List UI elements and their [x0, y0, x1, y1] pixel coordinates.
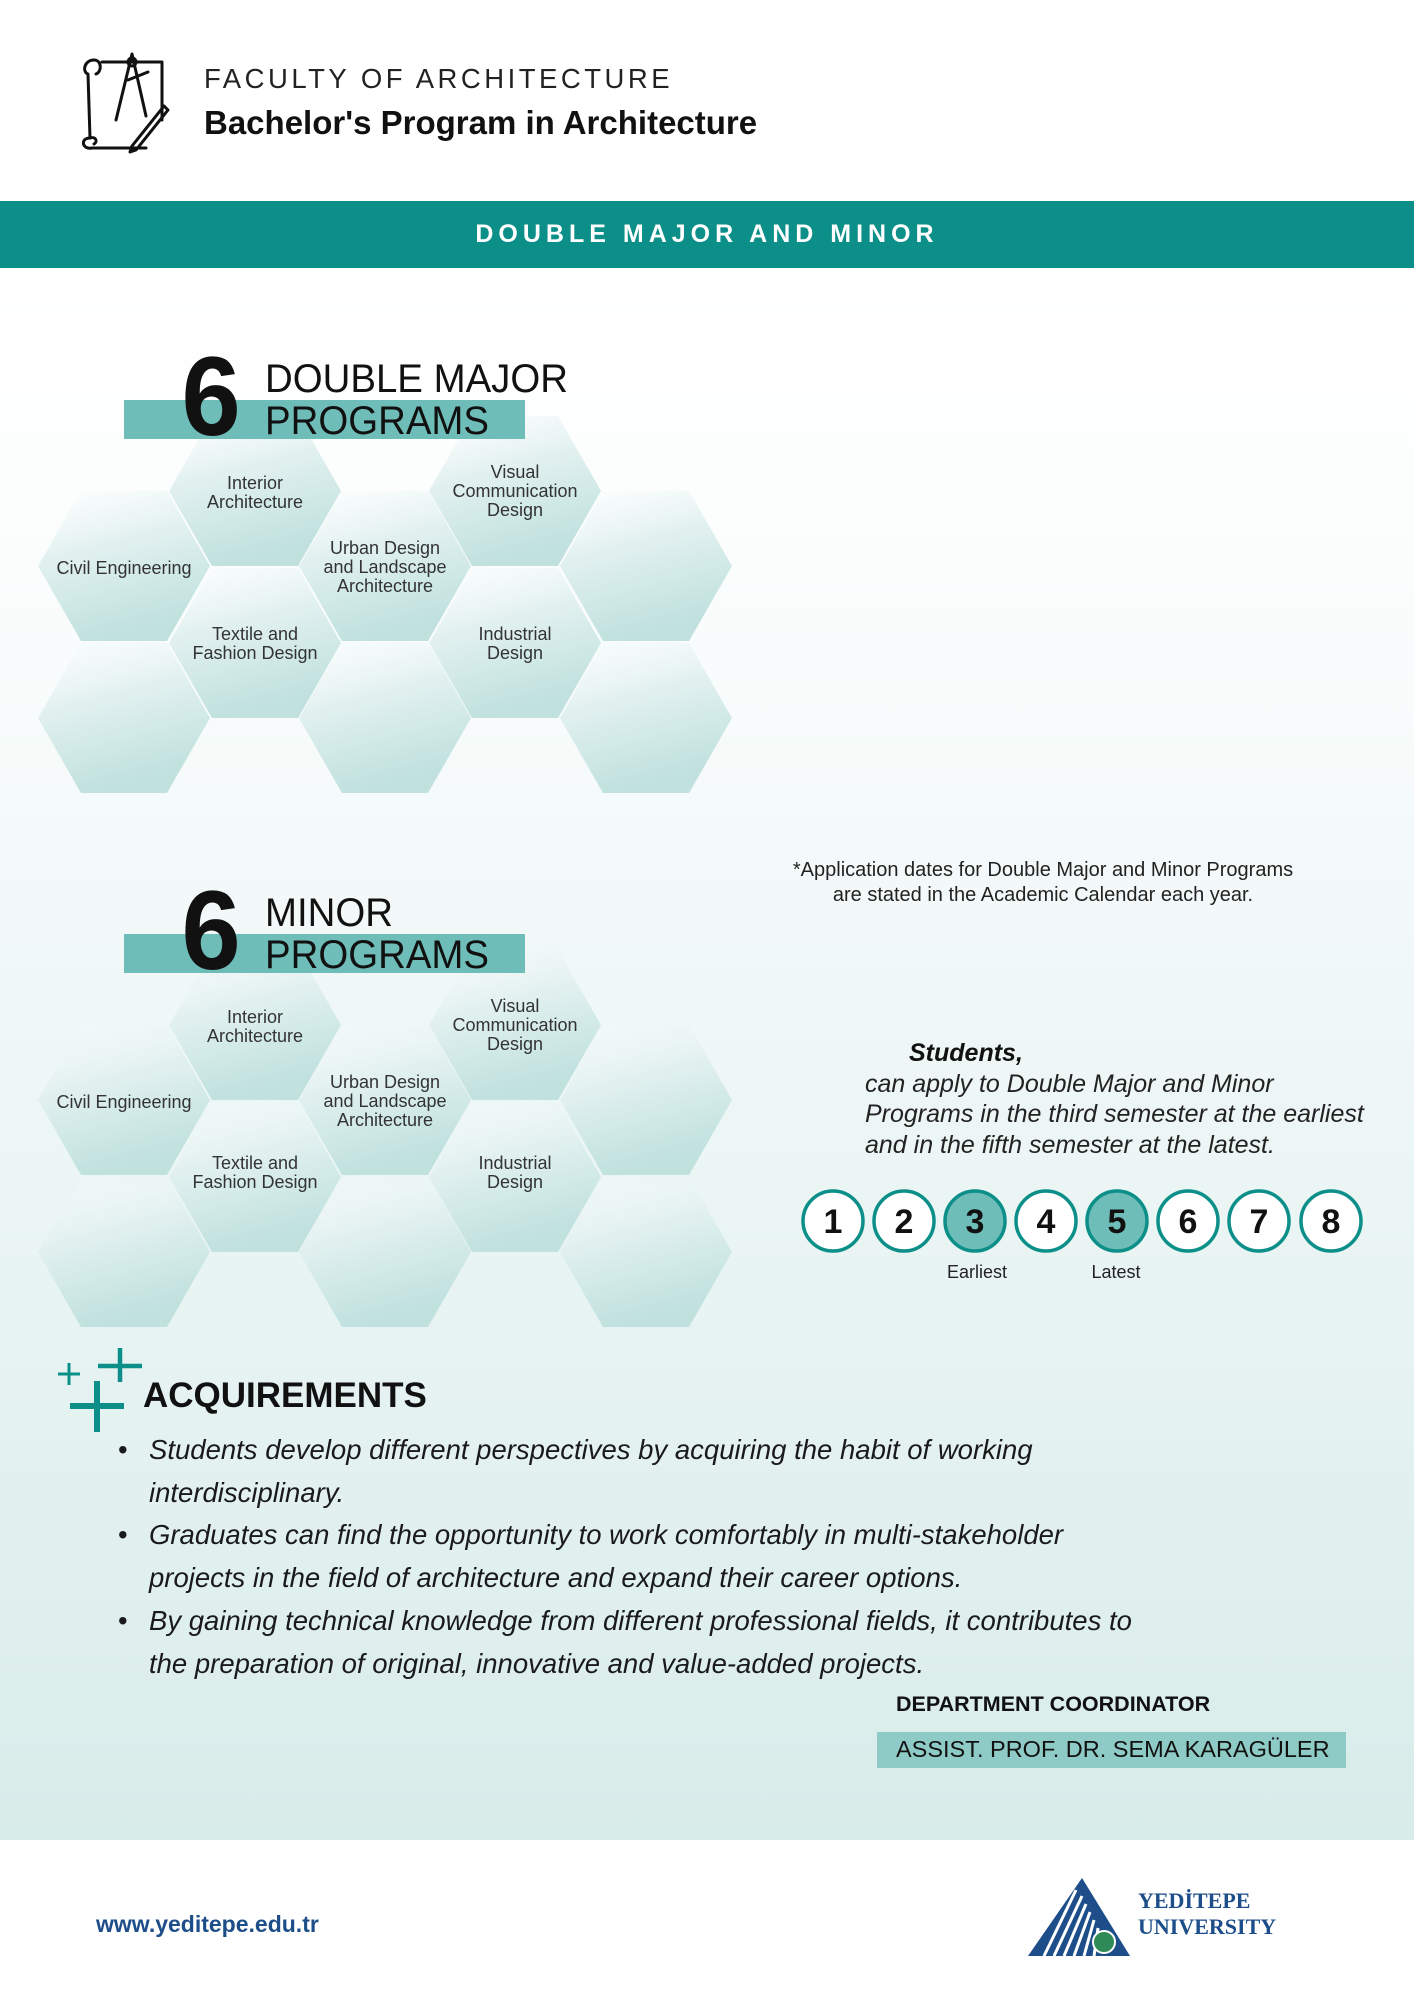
- hexagon grid: double major programs: Civil Engineering: [56, 558, 192, 578]
- list: acquirements: •: [118, 1519, 128, 1550]
- semester circles: 3: [966, 1203, 984, 1241]
- hexagon grid: minor programs: Interior: [227, 1007, 283, 1027]
- hexagon grid: minor programs: Communication: [452, 1015, 578, 1035]
- banner: DOUBLE MAJOR AND MINOR: [475, 220, 939, 248]
- heading: 6 minor programs: MINOR: [265, 891, 393, 935]
- hexagon grid: minor programs: Fashion Design: [192, 1172, 318, 1192]
- hexagon grid: double major programs: Design: [487, 643, 543, 663]
- hexagon grid: double major programs: Industrial: [478, 624, 552, 644]
- hexagon grid: minor programs: Urban Design: [330, 1072, 440, 1092]
- semester circles: 7: [1250, 1203, 1268, 1241]
- hexagon grid: minor programs: Architecture: [207, 1026, 303, 1046]
- list: acquirements: interdisciplinary.: [149, 1477, 344, 1508]
- logo: yeditepe university: UNIVERSITY: [1138, 1914, 1276, 1939]
- text block: students: and in the fifth semester at the latest.: [865, 1130, 1275, 1158]
- semester circles: [801, 1189, 1363, 1282]
- heading: 6 double major programs: DOUBLE MAJOR: [265, 357, 568, 401]
- hexagon grid: minor programs: and Landscape: [323, 1091, 447, 1111]
- hexagon grid: minor programs: Industrial: [478, 1153, 552, 1173]
- list: acquirements: the preparation of original, innovative and value-added projects.: [149, 1648, 924, 1679]
- semester circles: 1: [824, 1203, 842, 1241]
- hexagon grid: double major programs: Textile and: [212, 624, 298, 644]
- hexagon grid: minor programs: Civil Engineering: [56, 1092, 192, 1112]
- icon: plus signs: [58, 1348, 142, 1432]
- list: acquirements: Graduates can find the opportunity to work comfortably in multi-stakeholder: [149, 1519, 1063, 1550]
- banner: [0, 201, 1414, 268]
- coordinator: DEPARTMENT COORDINATOR: [896, 1692, 1210, 1716]
- heading: 6 minor programs: 6: [182, 868, 241, 993]
- heading: 6 minor programs: PROGRAMS: [265, 933, 489, 977]
- logo: yeditepe university: [1028, 1878, 1276, 1956]
- semester circles: 6: [1179, 1203, 1197, 1241]
- coordinator: ASSIST. PROF. DR. SEMA KARAGÜLER: [896, 1736, 1330, 1762]
- text: Bachelor's Program in Architecture: [204, 104, 757, 141]
- note: application dates: *Application dates for Double Major and Minor Programs: [793, 859, 1293, 881]
- header text: FACULTY OF ARCHITECTURE: [204, 63, 673, 94]
- hexagon grid: double major programs: Communication: [452, 481, 578, 501]
- hexagon grid: double major programs: Design: [487, 500, 543, 520]
- list: acquirements: [118, 1434, 1132, 1679]
- hexagon grid: minor programs: Textile and: [212, 1153, 298, 1173]
- hexagon grid: double major programs: Architecture: [207, 492, 303, 512]
- hexagon grid: minor programs: Design: [487, 1172, 543, 1192]
- list: acquirements: •: [118, 1434, 128, 1465]
- heading: 6 double major programs: [124, 334, 568, 459]
- hexagon grid: double major programs: Fashion Design: [192, 643, 318, 663]
- semester circles: 5: [1108, 1203, 1126, 1241]
- text block: students: [865, 1039, 1365, 1158]
- semester circles: 2: [895, 1203, 913, 1241]
- logo: yeditepe university: YEDİTEPE: [1138, 1888, 1250, 1913]
- hexagon grid: double major programs: and Landscape: [323, 557, 447, 577]
- hexagon grid: double major programs: Urban Design: [330, 538, 440, 558]
- note: application dates: are stated in the Academic Calendar each year.: [833, 884, 1253, 906]
- text block: students: can apply to Double Major and Minor: [865, 1070, 1274, 1098]
- heading: 6 double major programs: 6: [182, 334, 241, 459]
- text block: students: Programs in the third semester at the earliest: [865, 1100, 1364, 1128]
- hexagon grid: minor programs: [38, 968, 732, 1327]
- icon: architecture scroll: [82, 52, 170, 154]
- semester circles: 8: [1322, 1203, 1340, 1241]
- list: acquirements: Students develop different perspectives by acquiring the habit of working: [149, 1434, 1033, 1465]
- hexagon grid: double major programs: [38, 416, 732, 793]
- semester circles: Latest: [1091, 1262, 1141, 1282]
- hexagon grid: minor programs: Visual: [491, 996, 539, 1016]
- footer url: www.yeditepe.edu.tr: [96, 1911, 319, 1937]
- semester circles: 4: [1037, 1203, 1056, 1241]
- hexagon grid: minor programs: Architecture: [337, 1110, 433, 1130]
- semester circles: Earliest: [947, 1262, 1007, 1282]
- hexagon grid: double major programs: Architecture: [337, 576, 433, 596]
- heading: acquirements: ACQUIREMENTS: [143, 1376, 427, 1415]
- text block: students: Students,: [909, 1039, 1023, 1067]
- coordinator: [877, 1692, 1346, 1768]
- hexagon grid: minor programs: Design: [487, 1034, 543, 1054]
- heading: 6 minor programs: [124, 868, 525, 993]
- hexagon grid: double major programs: Visual: [491, 462, 539, 482]
- list: acquirements: By gaining technical knowledge from different professional fields, it contributes to: [149, 1605, 1132, 1636]
- list: acquirements: projects in the field of architecture and expand their career options.: [149, 1562, 962, 1593]
- hexagon grid: double major programs: Interior: [227, 473, 283, 493]
- heading: 6 double major programs: PROGRAMS: [265, 399, 489, 443]
- list: acquirements: •: [118, 1605, 128, 1636]
- note: application dates: [793, 859, 1293, 906]
